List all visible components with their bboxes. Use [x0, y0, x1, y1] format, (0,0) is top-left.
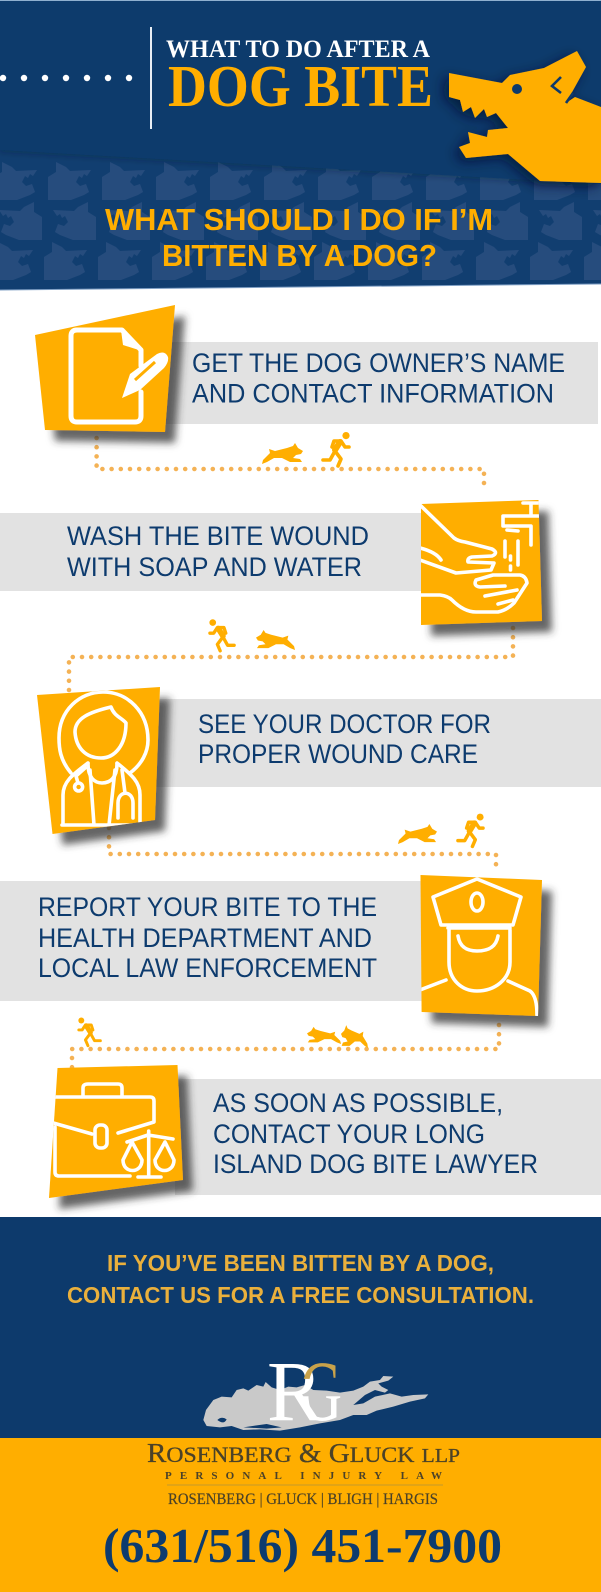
- dotted line: [0, 75, 132, 81]
- step 3 text: SEE YOUR DOCTOR FOR: [198, 709, 491, 739]
- call to action text: [67, 1250, 534, 1308]
- icon: runner 2: [209, 619, 234, 651]
- connector: dotted path 1: [97, 438, 484, 487]
- step 1 bar: [160, 342, 598, 424]
- header navy area: [0, 0, 601, 184]
- step 4 icon: police officer: [420, 875, 542, 1016]
- logo: Long Island map with monogram: [203, 1343, 428, 1439]
- step 2 bar: [0, 513, 425, 591]
- heading: question: WHAT SHOULD I DO IF I’M: [105, 202, 493, 237]
- icon: runner 1: [323, 432, 350, 466]
- step 4 bar: [0, 881, 425, 1001]
- step 2: [0, 500, 542, 625]
- heading: question: BITTEN BY A DOG?: [162, 238, 437, 273]
- step 3 bar: [155, 699, 601, 787]
- step 1 text: GET THE DOG OWNER’S NAME: [192, 348, 565, 378]
- step 1 text: AND CONTACT INFORMATION: [192, 378, 554, 408]
- heading: question: [105, 202, 493, 273]
- firm tagline: PERSONAL INJURY LAW: [165, 1470, 442, 1482]
- step 5 text: [213, 1088, 538, 1179]
- step 5 text: CONTACT YOUR LONG: [213, 1119, 485, 1149]
- icon: dog head: [449, 51, 601, 183]
- connector: dotted path 4: [72, 1025, 499, 1068]
- panel: footer contact: [0, 1438, 601, 1592]
- partner names: ROSENBERG | GLUCK | BLIGH | HARGIS: [168, 1491, 438, 1508]
- step 3 icon: doctor: [37, 687, 160, 834]
- logo: Long Island map with monogram: R: [267, 1343, 324, 1439]
- call to action text: IF YOU’VE BEEN BITTEN BY A DOG,: [107, 1250, 494, 1276]
- icon: dog chasing 2: [256, 629, 295, 650]
- connector: dotted path 2: [69, 628, 513, 690]
- step 1 icon: document and pen: [35, 305, 175, 432]
- firm name: ROSENBERG & GLUCK LLP: [147, 1438, 460, 1468]
- title divider: [150, 27, 152, 129]
- step 2 icon: washing hands: [420, 500, 542, 625]
- icon: two dogs: [307, 1024, 368, 1048]
- step 2 text: WASH THE BITE WOUND: [67, 521, 369, 551]
- step 2 text: WITH SOAP AND WATER: [67, 552, 362, 582]
- step 4 text: LOCAL LAW ENFORCEMENT: [38, 953, 377, 983]
- step 5 icon: briefcase and scales: [49, 1065, 183, 1198]
- icon: runner 3: [458, 814, 484, 846]
- logo: Long Island map with monogram: G: [300, 1343, 342, 1439]
- step 4: [0, 875, 542, 1016]
- step 3 text: PROPER WOUND CARE: [198, 739, 478, 769]
- step 4 text: REPORT YOUR BITE TO THE: [38, 892, 377, 922]
- step 1: [35, 305, 598, 432]
- icon: dog chasing 1: [262, 442, 303, 464]
- icon: dog chasing 3: [398, 823, 437, 844]
- step 4 text: [38, 892, 377, 983]
- step 5 text: ISLAND DOG BITE LAWYER: [213, 1149, 538, 1179]
- pattern band: [0, 148, 601, 290]
- step 5 bar: [175, 1079, 601, 1195]
- step 3: [37, 687, 601, 834]
- call to action text: CONTACT US FOR A FREE CONSULTATION.: [67, 1282, 534, 1308]
- title: WHAT TO DO AFTER A: [166, 36, 430, 63]
- step 2 text: [67, 521, 369, 582]
- step 4 text: HEALTH DEPARTMENT AND: [38, 923, 372, 953]
- icon: runner 4: [78, 1018, 100, 1046]
- step 1 text: [192, 348, 565, 408]
- title: DOG BITE: [168, 53, 433, 119]
- step 5 text: AS SOON AS POSSIBLE,: [213, 1088, 503, 1118]
- phone number: (631/516) 451-7900: [103, 1518, 502, 1573]
- connector: dotted path 3: [109, 828, 496, 873]
- panel: header: [0, 0, 601, 290]
- panel: footer call to action: [0, 1217, 601, 1439]
- step 3 text: [198, 709, 491, 769]
- step 5: [49, 1065, 601, 1198]
